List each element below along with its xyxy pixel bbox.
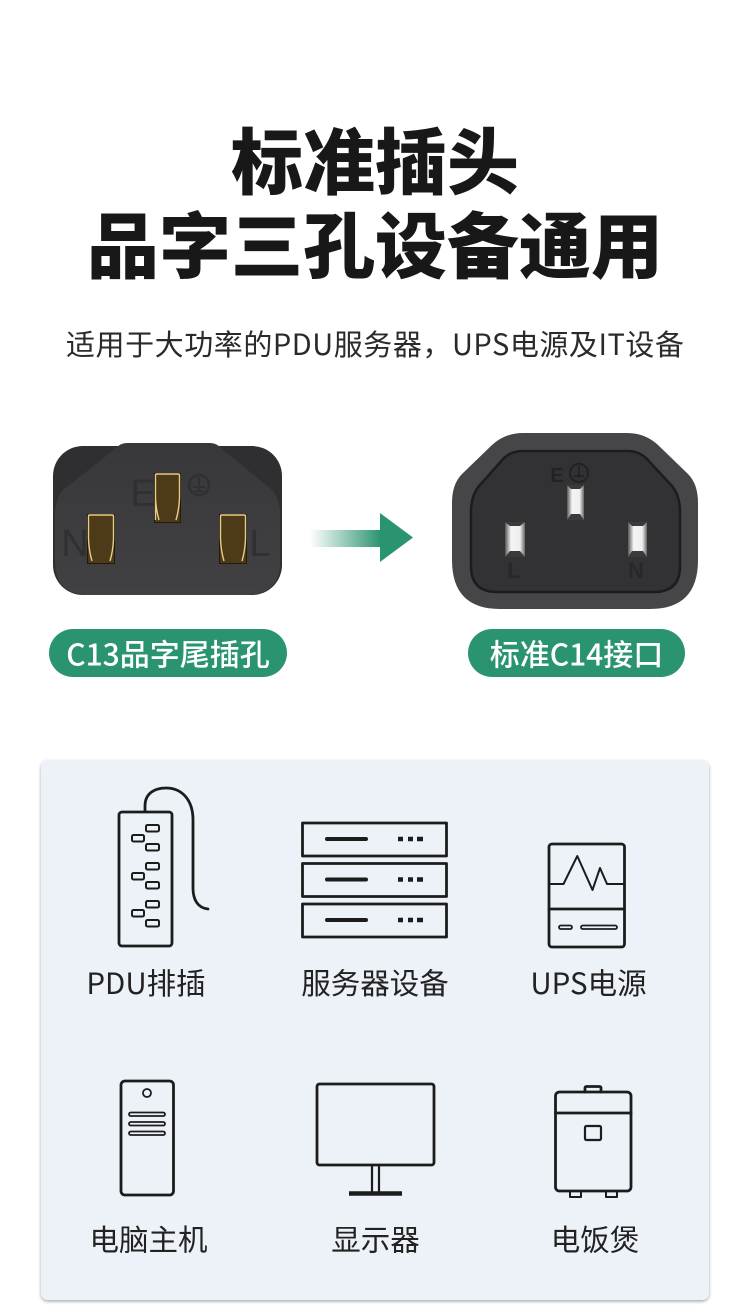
icon: server rack <box>302 823 446 937</box>
C14 socket photo: L <box>507 558 521 583</box>
C13 live pin <box>219 514 247 564</box>
C13 earth pin <box>154 473 181 523</box>
icon: rice cooker <box>556 1086 631 1197</box>
C14 socket photo <box>452 433 698 609</box>
C13 plug photo <box>53 443 282 595</box>
C13 plug photo: N <box>61 523 89 565</box>
arrow <box>310 513 413 562</box>
label pill: C13: C13品字尾插孔 <box>66 630 270 674</box>
label pill: C14: 标准C14接口 <box>490 630 663 674</box>
C14 earth pin <box>567 485 584 520</box>
label: servers: 服务器设备 <box>301 961 449 1003</box>
label: UPS: UPS电源 <box>530 961 647 1003</box>
panel: compatible devices <box>41 760 709 1300</box>
C13 plug photo: L <box>249 523 271 565</box>
label: PDU: PDU排插 <box>86 961 206 1003</box>
C14 socket photo: E <box>550 465 564 487</box>
C14 socket photo: N <box>628 558 644 583</box>
icon: desktop tower <box>121 1081 174 1195</box>
subtitle: 适用于大功率的PDU服务器，UPS电源及IT设备 <box>66 322 684 364</box>
label: monitor: 显示器 <box>331 1218 420 1260</box>
icon: UPS <box>549 844 624 947</box>
label: rice cooker: 电饭煲 <box>551 1218 639 1260</box>
C14 live pin <box>505 522 525 557</box>
label: desktop: 电脑主机 <box>89 1218 208 1260</box>
C14 neutral pin <box>628 522 647 557</box>
title: 标准插头 <box>231 104 519 210</box>
C13 neutral pin <box>87 514 115 564</box>
icon: monitor <box>317 1084 434 1194</box>
icon: PDU power strip <box>119 788 208 946</box>
title: 品字三孔设备通用 <box>87 188 663 294</box>
C13 plug photo: E <box>130 473 156 515</box>
title <box>87 104 663 294</box>
